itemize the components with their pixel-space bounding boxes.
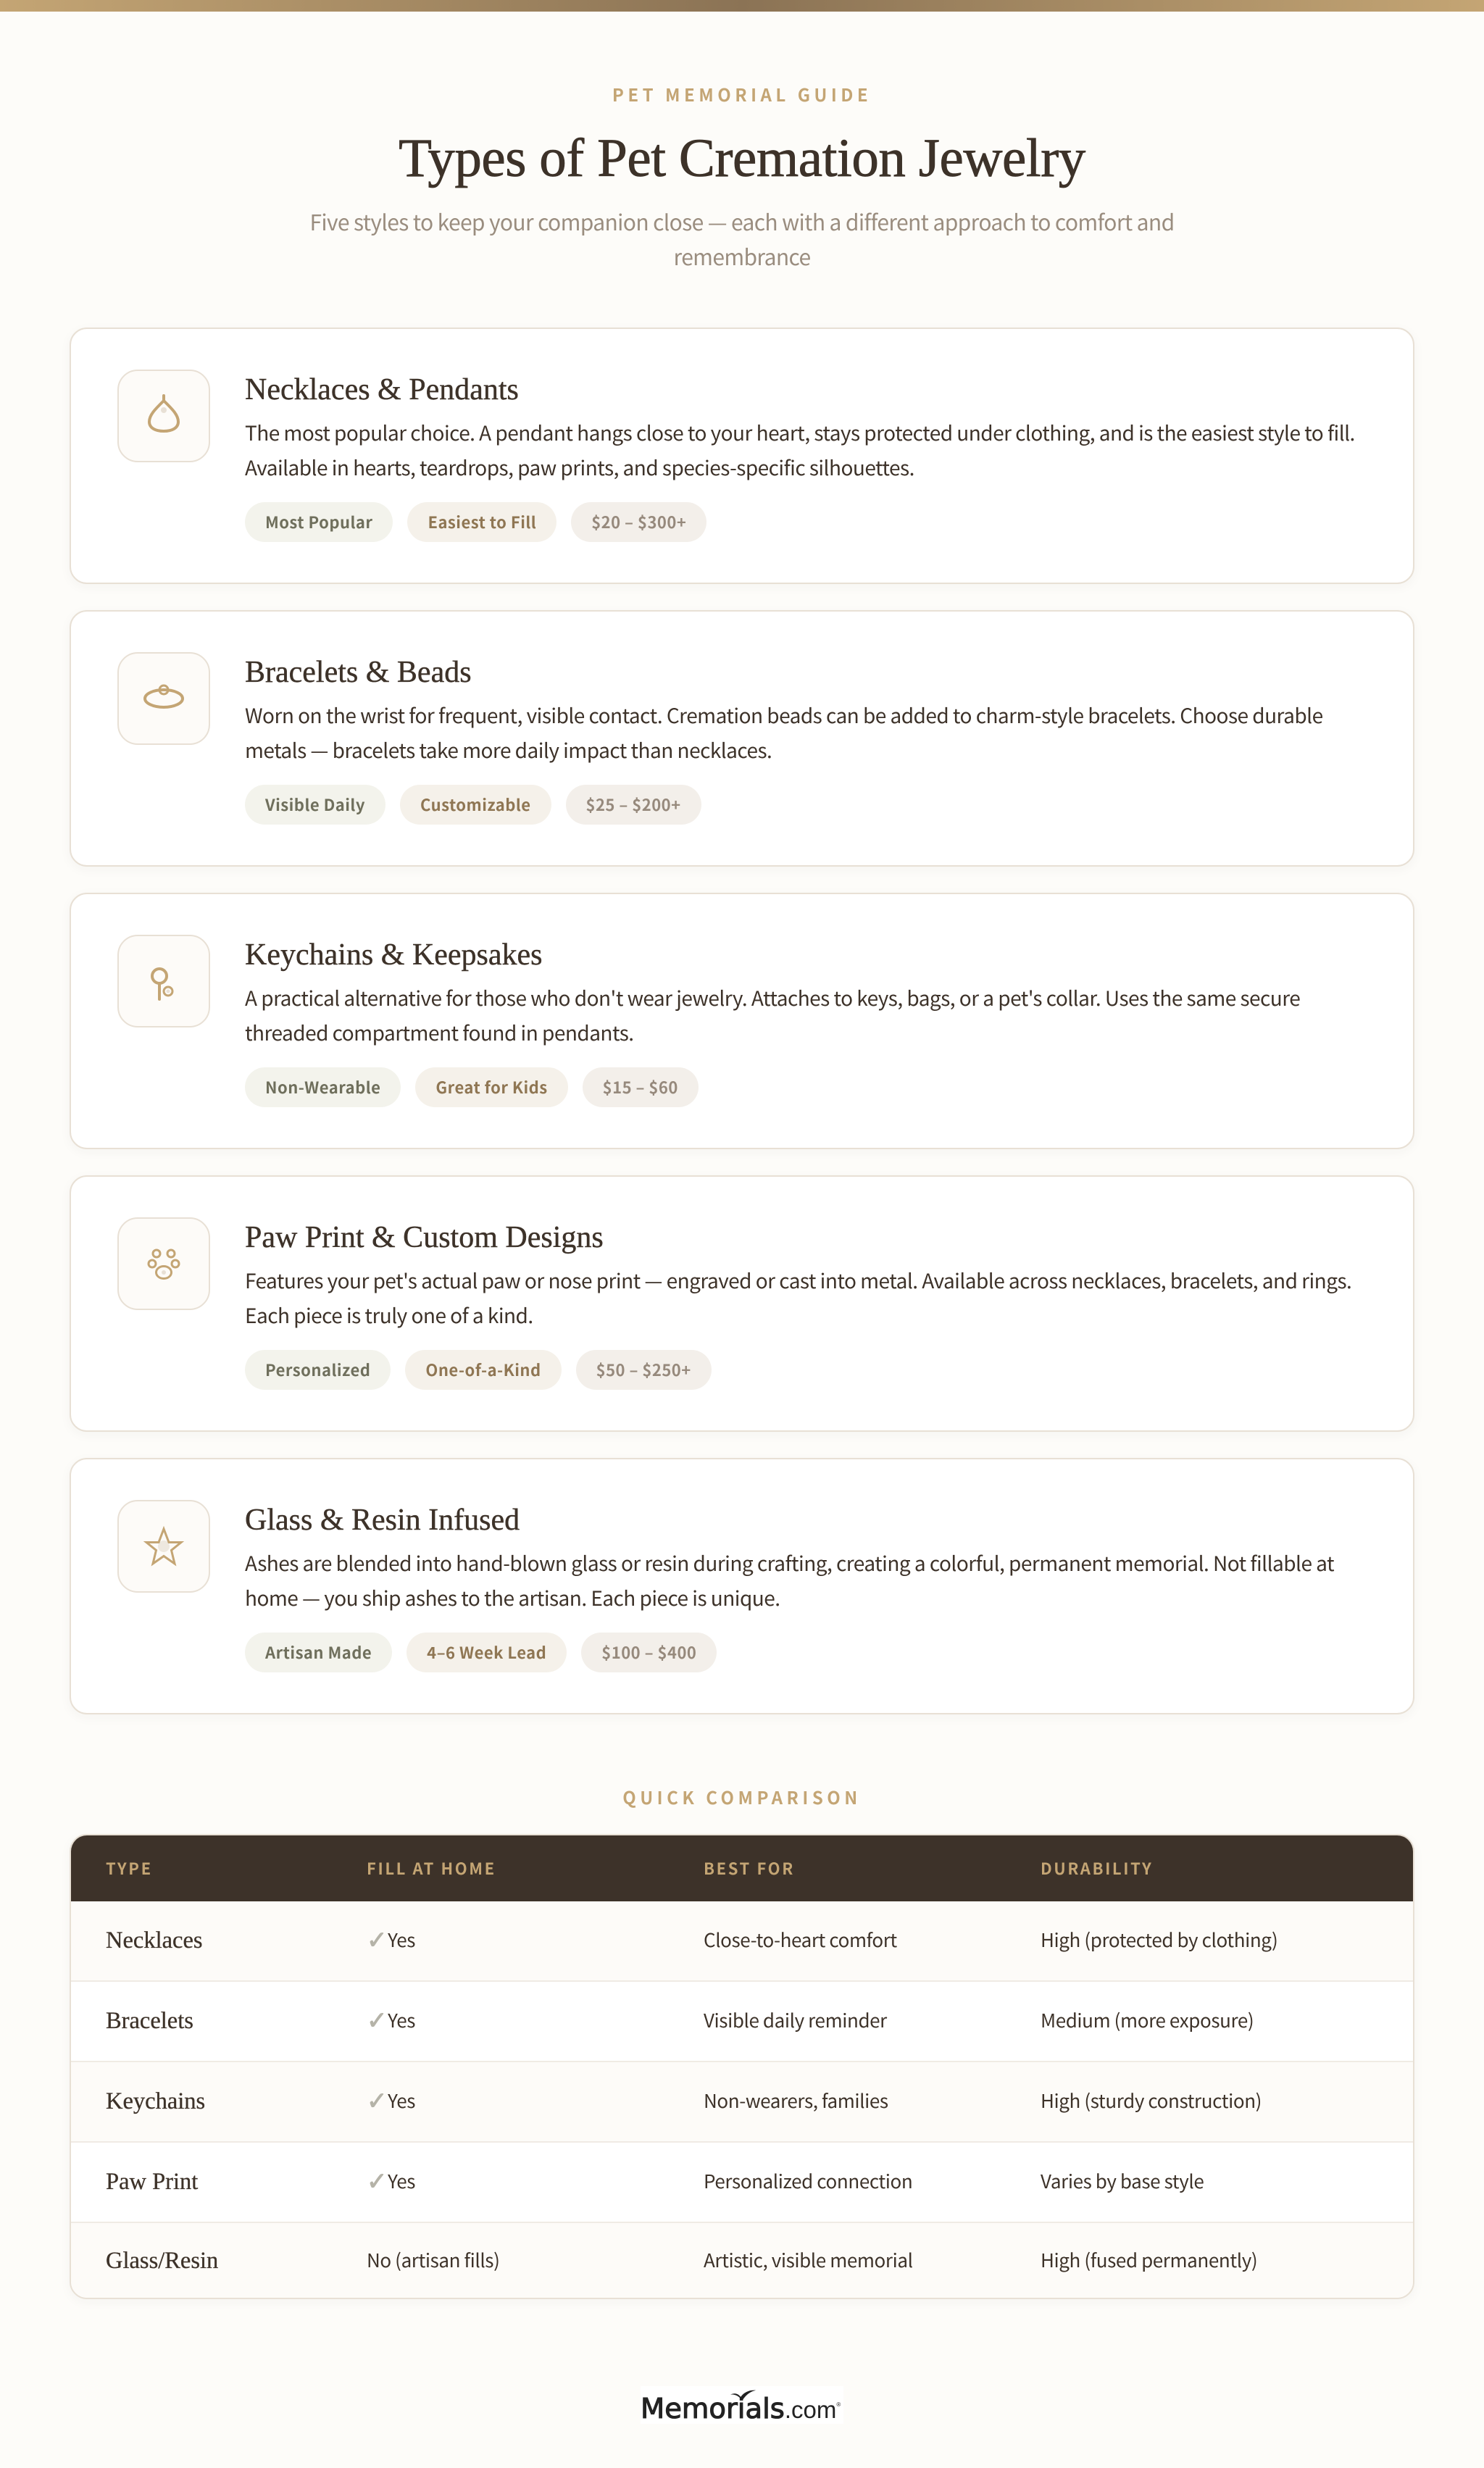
row: necklaces: Necklaces	[106, 1927, 203, 1954]
row: bracelets	[71, 1982, 1413, 2062]
row: keychains: Keychains	[106, 2088, 205, 2114]
card tags: Artisan Made	[265, 1641, 372, 1664]
row: glass and resin: No (artisan fills)	[367, 2246, 499, 2273]
card description	[245, 418, 1355, 482]
row: keychains	[71, 2062, 1413, 2143]
card tags: Visible Daily	[265, 793, 365, 816]
card description: A practical alternative for those who don't wear jewelry. Attaches to keys, bags, or a pet's collar. Uses the same secure	[245, 983, 1300, 1012]
row: glass and resin: Glass/Resin	[106, 2248, 218, 2274]
icon: teardrop pendant	[117, 370, 210, 462]
table header: DURABILITY	[1041, 1856, 1153, 1880]
card tags	[245, 502, 706, 542]
row: paw print: ✓Yes	[367, 2167, 415, 2196]
panel: necklaces and pendants	[70, 328, 1414, 584]
card heading: Paw Print & Custom Designs	[245, 1221, 604, 1254]
card tags: Easiest to Fill	[428, 510, 536, 533]
row: bracelets: Medium (more exposure)	[1041, 2006, 1254, 2033]
row: paw print	[71, 2143, 1413, 2223]
logo: Memorials.com	[641, 2386, 843, 2424]
row: glass and resin	[71, 2223, 1413, 2299]
card description: The most popular choice. A pendant hangs close to your heart, stays protected under clothing, and is the easiest style to fill.	[245, 418, 1355, 447]
row: glass and resin: Artistic, visible memorial	[704, 2246, 913, 2273]
card tags: $15 – $60	[603, 1075, 678, 1098]
card description: Available in hearts, teardrops, paw prints, and species-specific silhouettes.	[245, 453, 914, 482]
row: necklaces	[71, 1901, 1413, 1982]
card heading: Bracelets & Beads	[245, 656, 472, 689]
row: necklaces: High (protected by clothing)	[1041, 1926, 1277, 1953]
card tags: $50 – $250+	[596, 1358, 691, 1381]
card description	[245, 1266, 1351, 1330]
row: bracelets: ✓Yes	[367, 2006, 415, 2035]
title: Types of Pet Cremation Jewelry	[399, 128, 1085, 188]
table header	[71, 1835, 1413, 1901]
card description: Ashes are blended into hand-blown glass or resin during crafting, creating a colorful, permanent memorial. Not fillable at	[245, 1548, 1334, 1577]
row: necklaces: ✓Yes	[367, 1926, 415, 1955]
card description: threaded compartment found in pendants.	[245, 1018, 634, 1047]
eyebrow: PET MEMORIAL GUIDE	[612, 81, 872, 107]
row: bracelets: Bracelets	[106, 2008, 193, 2034]
card description: Features your pet's actual paw or nose print — engraved or cast into metal. Available across necklaces, bracelets, and rings.	[245, 1266, 1351, 1295]
subtitle	[309, 205, 1175, 272]
top gradient bar	[0, 0, 1484, 12]
subtitle: remembrance	[674, 240, 810, 272]
card description: home — you ship ashes to the artisan. Each piece is unique.	[245, 1583, 780, 1612]
row: paw print: Paw Print	[106, 2169, 198, 2195]
panel: bracelets and beads	[70, 610, 1414, 867]
icon: paw print	[117, 1217, 210, 1310]
row: paw print: Varies by base style	[1041, 2167, 1204, 2194]
row: keychains: High (sturdy construction)	[1041, 2087, 1262, 2114]
card tags: Customizable	[420, 793, 531, 816]
panel: paw print and custom designs	[70, 1175, 1414, 1432]
row: paw print: Personalized connection	[704, 2167, 912, 2194]
row: bracelets: Visible daily reminder	[704, 2006, 887, 2033]
card heading: Keychains & Keepsakes	[245, 938, 543, 972]
panel: glass and resin infused	[70, 1458, 1414, 1714]
card tags: $100 – $400	[601, 1641, 696, 1664]
card heading: Glass & Resin Infused	[245, 1504, 520, 1537]
icon: keychain	[117, 935, 210, 1027]
subtitle: Five styles to keep your companion close — each with a different approach to comfort and	[309, 205, 1175, 237]
section heading: quick comparison: QUICK COMPARISON	[622, 1784, 862, 1809]
row: glass and resin: High (fused permanently)	[1041, 2246, 1257, 2273]
card tags	[245, 1350, 712, 1390]
card description	[245, 983, 1300, 1047]
card tags: Non-Wearable	[265, 1075, 380, 1098]
card tags	[245, 1067, 699, 1107]
table header: BEST FOR	[704, 1856, 795, 1880]
comparison table	[70, 1834, 1414, 2299]
card heading: Necklaces & Pendants	[245, 373, 519, 407]
table header: FILL AT HOME	[367, 1856, 496, 1880]
card description: Worn on the wrist for frequent, visible contact. Cremation beads can be added to charm-style bracelets. Choose durable	[245, 701, 1323, 730]
card tags: Personalized	[265, 1358, 370, 1381]
card description	[245, 701, 1323, 764]
table header: TYPE	[106, 1856, 153, 1880]
card tags: $25 – $200+	[586, 793, 681, 816]
row: keychains: ✓Yes	[367, 2087, 415, 2116]
card tags	[245, 785, 701, 825]
card tags: $20 – $300+	[591, 510, 686, 533]
logo bird	[730, 2390, 756, 2401]
icon: star	[117, 1500, 210, 1593]
card tags: Great for Kids	[435, 1075, 548, 1098]
card description: Each piece is truly one of a kind.	[245, 1301, 533, 1330]
row: necklaces: Close-to-heart comfort	[704, 1926, 897, 1953]
card tags: 4–6 Week Lead	[427, 1641, 546, 1664]
card tags	[245, 1633, 717, 1672]
card description: metals — bracelets take more daily impact than necklaces.	[245, 735, 772, 764]
panel: keychains and keepsakes	[70, 893, 1414, 1149]
icon: bracelet	[117, 652, 210, 745]
card tags: Most Popular	[265, 510, 372, 533]
card description	[245, 1548, 1335, 1612]
row: keychains: Non-wearers, families	[704, 2087, 888, 2114]
card tags: One-of-a-Kind	[425, 1358, 541, 1381]
